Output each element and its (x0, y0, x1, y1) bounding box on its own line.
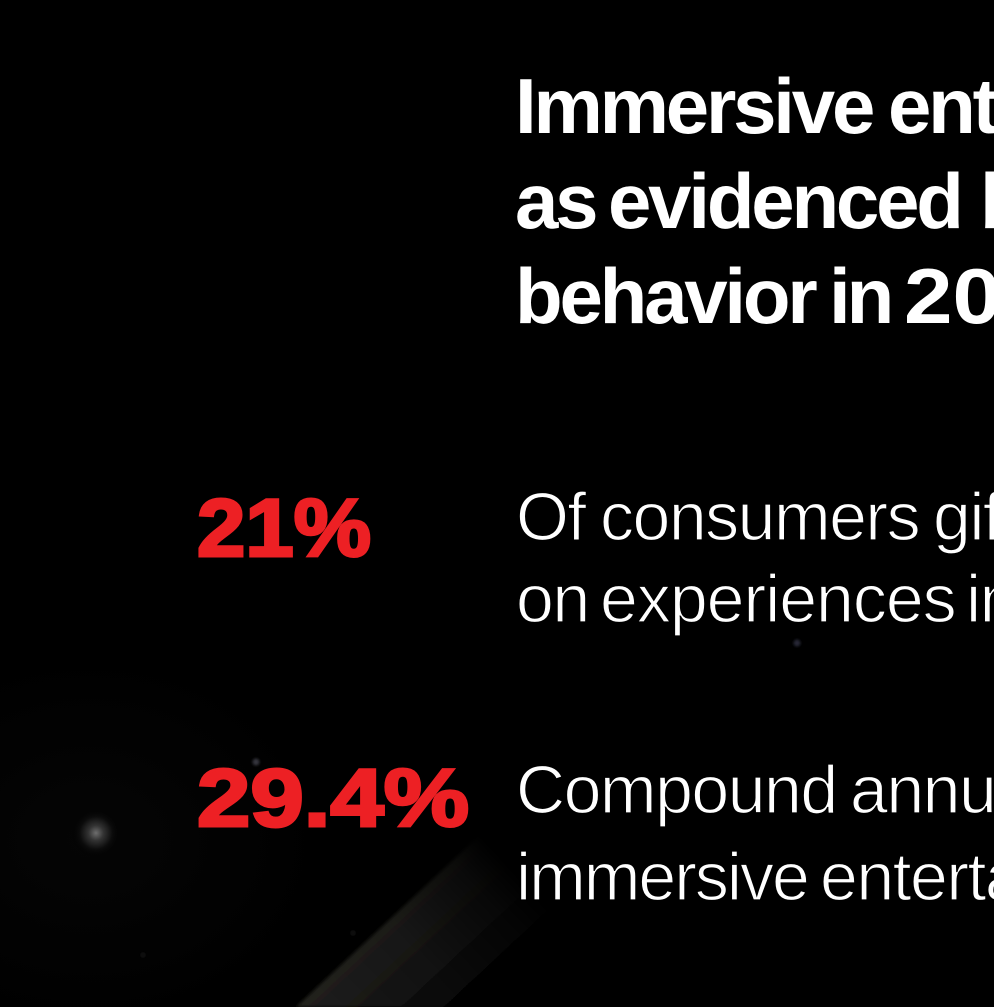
ambient haze (0, 650, 330, 1007)
title: evidenced (608, 157, 961, 245)
stat text: growth (516, 752, 994, 915)
stat text: gifting: on (516, 561, 589, 637)
stat: 29.4%: 29.4% (197, 753, 469, 844)
title: in (829, 252, 890, 340)
title: as (515, 157, 595, 245)
title (515, 62, 994, 340)
stat text: gifting: Of (516, 479, 585, 555)
glow (71, 808, 121, 858)
stat text: growth: Compound (516, 752, 837, 828)
stat text: growth: immersive (516, 839, 808, 915)
light beam (297, 856, 495, 1007)
stat text: gifting (516, 479, 994, 637)
stat text: gifting: consumers (600, 479, 919, 555)
title: behavior (515, 252, 815, 340)
stat: 21%: 21% (197, 483, 371, 574)
stat text: gifting: experiences (600, 561, 956, 637)
title: Immersive (515, 62, 872, 150)
dots (140, 640, 800, 958)
